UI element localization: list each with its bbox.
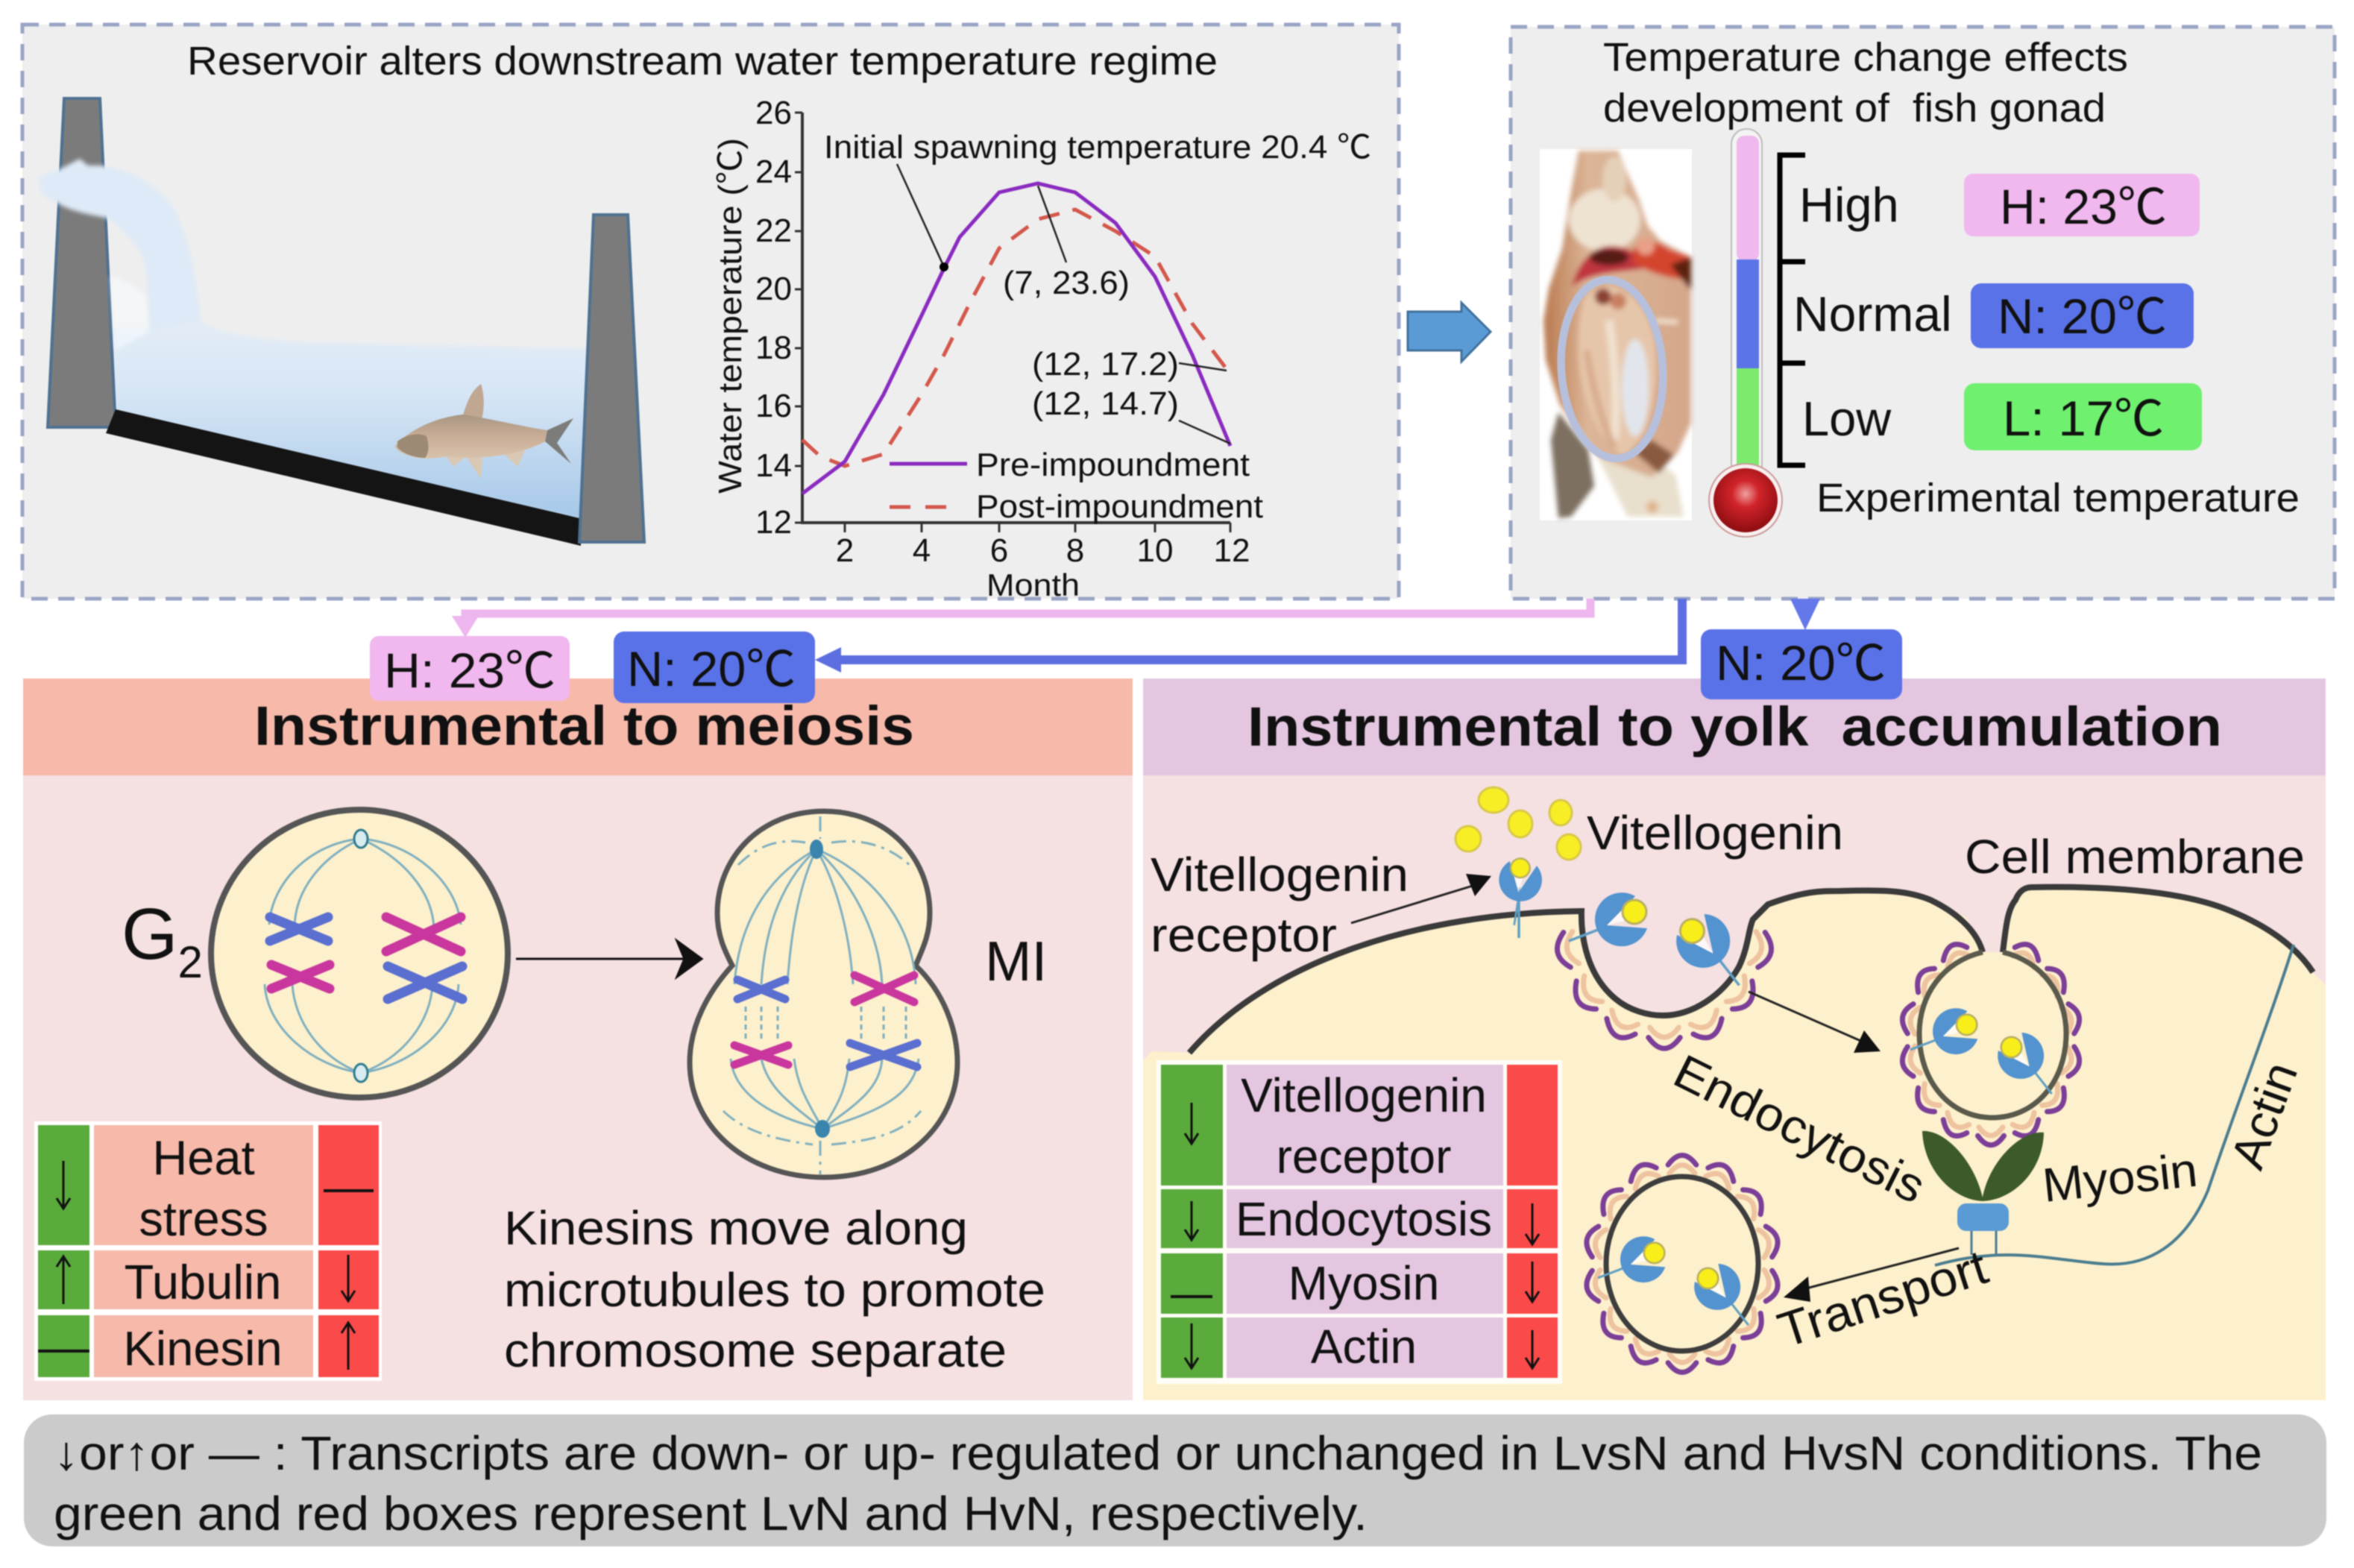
pill: normal temperature right: N: 20℃ bbox=[1716, 635, 1886, 690]
label: MI: MI bbox=[985, 930, 1047, 992]
icon: fish bbox=[395, 384, 573, 479]
label: vitellogenin receptor: Vitellogenin bbox=[1151, 848, 1409, 901]
pill: H 23C bbox=[1964, 174, 2200, 236]
pit coat bbox=[1554, 930, 1775, 1048]
line chart: water temperature by month: 4 bbox=[913, 532, 931, 569]
label: high: High bbox=[1799, 177, 1899, 232]
heading: temperature change: development of fish gonad bbox=[1603, 86, 2106, 130]
arrow: down to normal pill bbox=[1790, 599, 1820, 630]
line chart: water temperature by month: Water temperature (℃) bbox=[712, 138, 749, 494]
pill: normal temperature left bbox=[614, 632, 815, 703]
heading: reservoir: Reservoir alters downstream water temperature regime bbox=[187, 39, 1218, 84]
line chart: water temperature by month: 26 bbox=[755, 95, 792, 131]
table: yolk transcripts: Endocytosis bbox=[1236, 1192, 1492, 1246]
line chart: water temperature by month: (12, 14.7) bbox=[1032, 385, 1179, 422]
line chart: water temperature by month: Month bbox=[986, 567, 1080, 602]
caption: experimental temperature: Experimental temperature bbox=[1816, 476, 2300, 520]
label: transport: Transport bbox=[1771, 1238, 1994, 1358]
diagram: MI cell bbox=[690, 811, 957, 1177]
legend bbox=[890, 447, 1263, 525]
line chart: water temperature by month: 18 bbox=[755, 330, 792, 366]
arrow: transport bbox=[1784, 1248, 1959, 1302]
line chart: water temperature by month: 16 bbox=[755, 388, 792, 424]
table: yolk transcripts: Myosin bbox=[1288, 1256, 1439, 1310]
legend note bbox=[24, 1414, 2326, 1546]
line chart: water temperature by month: 8 bbox=[1066, 532, 1084, 569]
line chart: water temperature by month: 14 bbox=[755, 447, 792, 484]
panel: instrumental to meiosis bbox=[23, 678, 1133, 1400]
pill: normal temperature left: N: 20℃ bbox=[627, 641, 796, 696]
pill: N 20C: N: 20℃ bbox=[1998, 289, 2167, 344]
arrow: high arrowhead bbox=[452, 616, 479, 637]
photo: fish gonad bbox=[1540, 149, 1692, 520]
arrow: to receptor bbox=[1351, 874, 1491, 923]
text: kinesins note: microtubules to promote bbox=[504, 1263, 1045, 1317]
pill: L 17C bbox=[1964, 383, 2202, 450]
table: heat stress transcripts: Kinesin bbox=[123, 1321, 283, 1376]
connector: pink high line bbox=[465, 599, 1590, 626]
panel: temperature change effects on gonad bbox=[1511, 27, 2335, 599]
line chart: water temperature by month bbox=[712, 95, 1371, 602]
line chart: water temperature by month: 24 bbox=[755, 154, 792, 190]
line chart: water temperature by month: 2 bbox=[836, 532, 854, 569]
vitellogenin particles bbox=[1455, 787, 1581, 860]
pill: L 17C: L: 17℃ bbox=[2003, 391, 2164, 446]
arrow: endocytosis bbox=[1749, 992, 1881, 1053]
label: myosin: Myosin bbox=[2040, 1143, 2200, 1212]
legend: Post-impoundment bbox=[976, 488, 1263, 525]
panel: instrumental to yolk accumulation bbox=[1143, 678, 2326, 1400]
line chart: water temperature by month: (12, 17.2) bbox=[1032, 346, 1179, 382]
pill: normal temperature right bbox=[1701, 629, 1902, 699]
header: meiosis: Instrumental to meiosis bbox=[254, 695, 914, 757]
header: meiosis bbox=[23, 678, 1133, 775]
line chart: water temperature by month: (7, 23.6) bbox=[1003, 265, 1130, 301]
vesicle: transport bbox=[1584, 1155, 1781, 1373]
cell membrane bbox=[1189, 887, 2313, 1053]
legend note: green and red boxes represent LvN and HvN, respectively. bbox=[54, 1487, 1368, 1540]
receptors in pit bbox=[1569, 892, 1744, 999]
pill: high temperature: H: 23℃ bbox=[384, 643, 556, 698]
pill: N 20C bbox=[1971, 283, 2194, 348]
table: heat stress transcripts: Tubulin bbox=[125, 1255, 281, 1309]
label: actin: Actin bbox=[2220, 1055, 2308, 1176]
header: yolk bbox=[1143, 678, 2326, 775]
label: vitellogenin: Vitellogenin bbox=[1587, 806, 1843, 860]
label: cell membrane: Cell membrane bbox=[1965, 830, 2305, 884]
legend note: ↓or↑or — : Transcripts are down- or up- regulated or unchanged in LvsN and HvsN conditions. The bbox=[54, 1426, 2262, 1480]
table: heat stress transcripts bbox=[34, 1121, 382, 1381]
label: normal: Normal bbox=[1793, 286, 1952, 341]
label: G2: G bbox=[122, 893, 177, 975]
label: vitellogenin receptor: receptor bbox=[1151, 908, 1337, 962]
label: endocytosis: Endocytosis bbox=[1666, 1044, 1933, 1214]
series: pre-impoundment bbox=[802, 183, 1230, 494]
icon: myosin bbox=[1922, 1131, 2044, 1255]
table: heat stress transcripts: stress bbox=[139, 1191, 268, 1246]
arrow: panel to panel bbox=[1408, 303, 1491, 362]
label: low: Low bbox=[1802, 391, 1892, 446]
bracket bbox=[1780, 155, 1805, 465]
table: heat stress transcripts: Heat bbox=[152, 1130, 255, 1185]
receptor bbox=[1481, 851, 1549, 938]
vesicle: endocytic bbox=[1900, 939, 2082, 1145]
cell cytoplasm bbox=[1143, 887, 2326, 1400]
line chart: water temperature by month: 6 bbox=[990, 532, 1008, 569]
table: yolk transcripts: Actin bbox=[1311, 1320, 1417, 1373]
text: kinesins note: chromosome separate bbox=[504, 1323, 1007, 1377]
heading: temperature change: Temperature change effects bbox=[1603, 35, 2128, 80]
line chart: water temperature by month: 12 bbox=[755, 504, 792, 541]
illustration: reservoir dam and fish bbox=[38, 98, 644, 546]
series: post-impoundment bbox=[802, 210, 1227, 466]
line chart: water temperature by month: 22 bbox=[755, 212, 792, 249]
table: yolk transcripts bbox=[1156, 1060, 1562, 1384]
connector: blue normal line bbox=[828, 599, 1682, 660]
label: G2: 2 bbox=[177, 937, 203, 987]
legend: Pre-impoundment bbox=[976, 447, 1250, 483]
line chart: water temperature by month: 20 bbox=[755, 271, 792, 307]
table: yolk transcripts: receptor bbox=[1277, 1130, 1451, 1183]
arrow: G2 to MI bbox=[516, 941, 702, 977]
arrow: normal arrowhead bbox=[815, 647, 841, 673]
actin filament bbox=[1935, 945, 2294, 1265]
icon: thermometer bbox=[1709, 129, 1782, 537]
text: kinesins note: Kinesins move along bbox=[504, 1201, 968, 1255]
table: yolk transcripts: Vitellogenin bbox=[1241, 1068, 1487, 1122]
panel: reservoir alters water temperature bbox=[22, 25, 1399, 602]
line chart: water temperature by month: 10 bbox=[1137, 532, 1173, 569]
pill: H 23C: H: 23℃ bbox=[2000, 179, 2167, 234]
line chart: water temperature by month: 12 bbox=[1214, 532, 1250, 569]
diagram: G2 cell bbox=[211, 810, 508, 1098]
line chart: water temperature by month: Initial spawning temperature 20.4 ℃ bbox=[824, 129, 1371, 166]
header: yolk: Instrumental to yolk accumulation bbox=[1247, 696, 2222, 758]
